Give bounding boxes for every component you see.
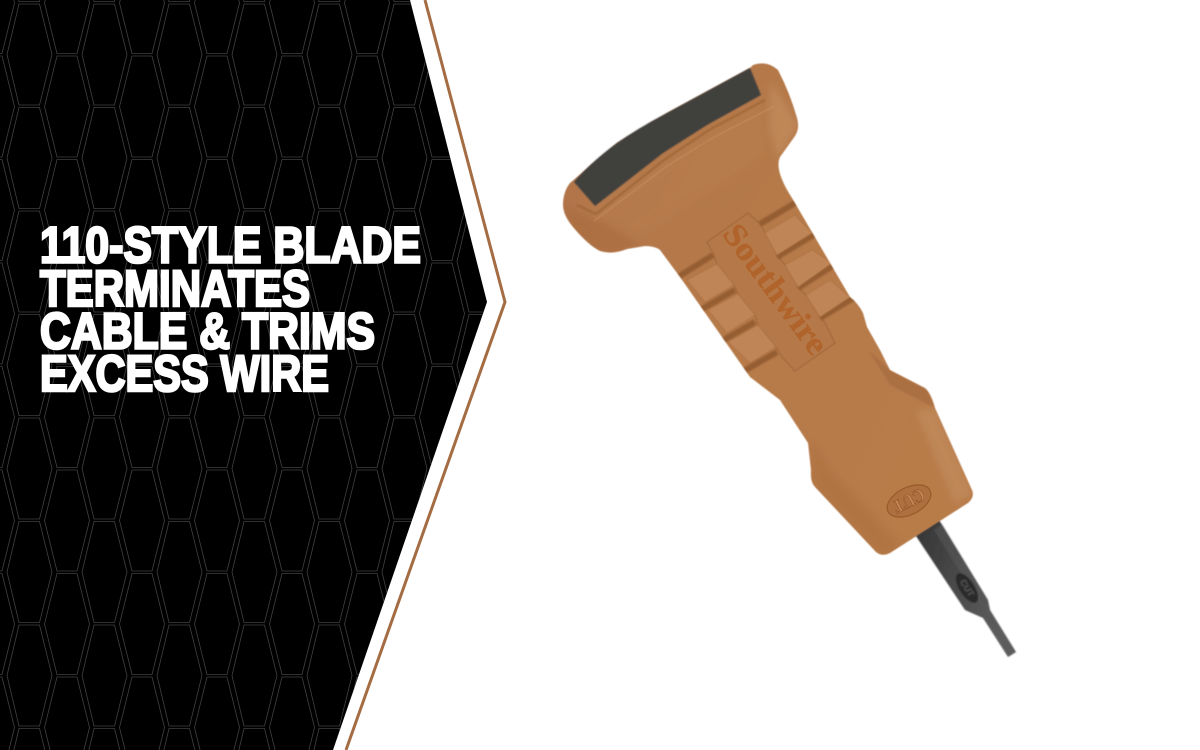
panel: black chevron background [0, 0, 487, 750]
back bump [872, 356, 933, 406]
pad groove lines [577, 100, 765, 214]
grip grooves [678, 200, 854, 373]
lower body highlight [920, 410, 970, 500]
icon: steel blade: CUT [958, 578, 977, 599]
icon: steel blade [912, 515, 1016, 657]
title: TERMINATES [40, 260, 310, 317]
title: EXCESS WIRE [40, 345, 329, 402]
CUT badge: CUT [889, 483, 928, 517]
CUT badge [882, 478, 936, 524]
product photo: punch-down tool [550, 50, 1016, 657]
brand wordmark: Southwire [715, 217, 835, 362]
head shading [580, 95, 775, 250]
chevron outline stroke [346, 0, 505, 750]
handle body [562, 62, 974, 556]
title [40, 216, 421, 402]
top rubber strike pad [574, 68, 761, 206]
grip plate with recessed panel [707, 213, 835, 371]
title: CABLE & TRIMS [40, 302, 375, 360]
title: 110-STYLE BLADE [40, 216, 421, 274]
grip pads [687, 215, 850, 363]
